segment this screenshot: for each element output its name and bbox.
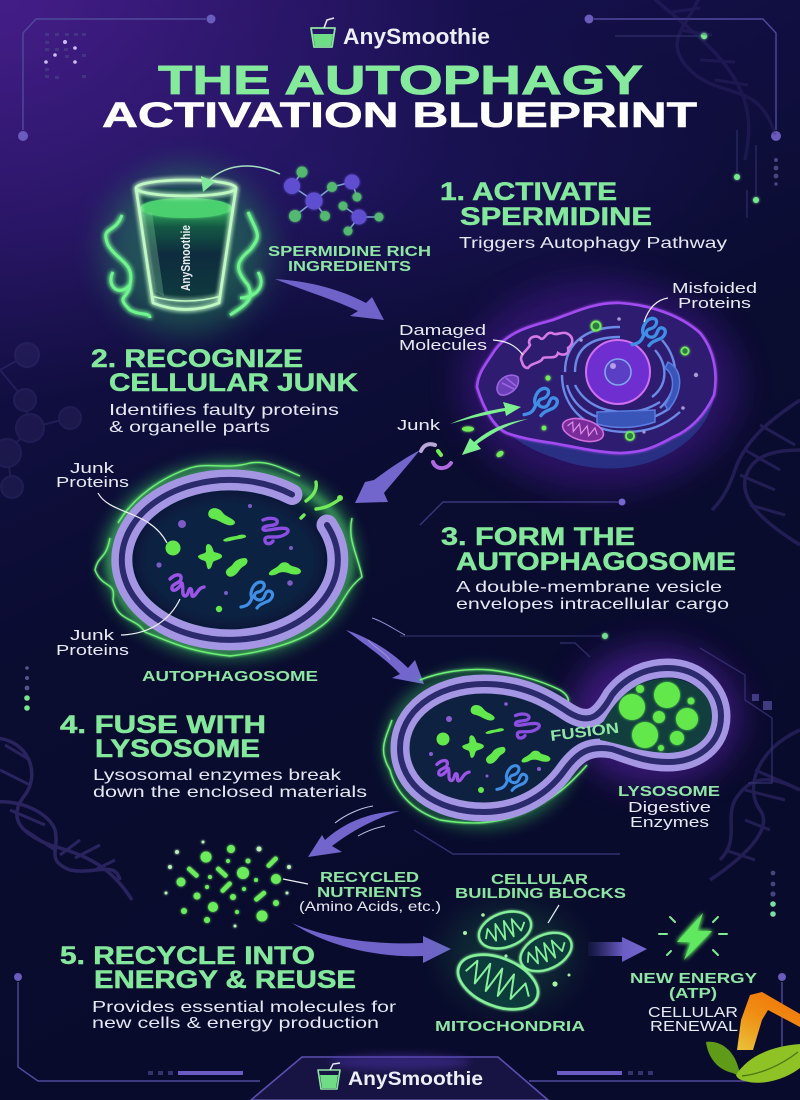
icon: glowing smoothie glass	[104, 166, 280, 332]
label: lysosome: LYSOSOME	[618, 783, 720, 800]
label: cellular building blocks: BUILDING BLOCKS	[455, 885, 626, 902]
label: junk: Junk	[397, 417, 441, 434]
step 1 text: 1. ACTIVATE	[440, 178, 617, 206]
cell diagram	[421, 280, 740, 490]
footer wordmark: AnySmoothie	[348, 1069, 483, 1090]
step 5 text	[60, 942, 397, 1032]
corner brand mark	[706, 992, 800, 1083]
step 3 text: AUTOPHAGOSOME	[456, 548, 736, 576]
glass body	[137, 188, 235, 309]
label: new energy	[630, 970, 757, 1035]
escaping fragments	[301, 482, 340, 518]
step 3 text	[441, 523, 736, 613]
label: cellular building blocks	[455, 871, 626, 923]
label: damaged molecules	[399, 322, 523, 355]
footer logo panel	[251, 1054, 548, 1100]
junk protein	[524, 388, 557, 416]
arrow: fusion to nutrients	[308, 806, 400, 857]
title: ACTIVATION BLUEPRINT	[102, 96, 697, 135]
arrow: autophagosome to fusion	[346, 618, 424, 684]
molecule: spermidine	[284, 166, 384, 236]
recycled nutrient particles	[164, 840, 291, 928]
step 2 text: Identifies faulty proteins	[109, 402, 339, 419]
fusion diagram	[384, 646, 740, 823]
faint molecule decoration	[0, 343, 81, 498]
step 2 text: CELLULAR JUNK	[109, 369, 358, 397]
title: THE AUTOPHAGY	[158, 57, 643, 103]
step 4 text: Lysosomal enzymes break	[93, 767, 342, 784]
label: recycled nutrients: RECYCLED	[320, 869, 419, 886]
label: junk proteins upper: Proteins	[56, 474, 129, 491]
icon: smoothie glass	[311, 18, 335, 47]
step 5 text: 5. RECYCLE INTO	[60, 942, 315, 970]
cargo	[471, 705, 495, 720]
step 3 text: 3. FORM THE	[441, 523, 635, 551]
step 4 text: down the enclosed materials	[93, 784, 367, 801]
step 4 text	[60, 711, 367, 801]
label: lysosome: Enzymes	[630, 814, 709, 831]
label: new energy: CELLULAR	[648, 1004, 738, 1021]
label: junk proteins lower: Proteins	[56, 642, 129, 659]
arrow into the glass	[201, 166, 280, 192]
green swirls	[106, 212, 261, 318]
green vesicles	[462, 322, 689, 458]
step 5 text: Provides essential molecules for	[92, 999, 397, 1016]
label: lysosome: Digestive	[628, 799, 711, 816]
label: new energy: (ATP)	[669, 985, 717, 1002]
double membrane ring	[122, 480, 338, 640]
mitochondrion	[560, 414, 606, 446]
step 1 text: SPERMIDINE	[460, 203, 652, 231]
label: damaged molecules: Molecules	[399, 337, 487, 354]
label: recycled nutrients	[283, 869, 441, 914]
arrow: cell to autophagosome	[355, 450, 420, 503]
step 5 text: ENERGY & REUSE	[94, 966, 356, 994]
damaged molecules squiggle	[521, 333, 572, 368]
label: cellular building blocks: CELLULAR	[491, 871, 588, 888]
misfolded protein	[632, 318, 665, 346]
lightning edge	[95, 462, 362, 656]
title	[102, 57, 697, 135]
green arrow in	[450, 402, 521, 424]
label: junk proteins upper: Junk	[70, 460, 115, 477]
junk fragments	[421, 444, 451, 468]
label: spermidine rich ingredients: SPERMIDINE RICH	[268, 243, 431, 260]
icon: energy bolt	[659, 913, 727, 960]
arrow: mitochondria to ATP	[588, 937, 647, 962]
step 4 text: LYSOSOME	[95, 735, 260, 763]
step 1 text	[440, 178, 727, 252]
arrow: nutrients to mitochondria	[292, 923, 451, 963]
autophagosome	[95, 462, 362, 656]
label: autophagosome: AUTOPHAGOSOME	[142, 668, 318, 685]
step 4 text: 4. FUSE WITH	[60, 711, 266, 739]
step 1 text: Triggers Autophagy Pathway	[459, 235, 727, 252]
fusion label: FUSION	[549, 720, 620, 745]
label: junk proteins lower: Junk	[70, 627, 115, 644]
label: new energy: NEW ENERGY	[630, 970, 757, 987]
logo wordmark: AnySmoothie	[343, 24, 490, 49]
label: spermidine rich ingredients: INGREDIENTS	[288, 258, 411, 275]
label: damaged molecules: Damaged	[399, 322, 486, 339]
step 3 text: envelopes intracellular cargo	[456, 596, 729, 613]
cargo	[208, 508, 235, 525]
lysosome enzymes	[619, 682, 698, 751]
label: recycled nutrients: (Amino Acids, etc.)	[299, 899, 441, 914]
glass label: AnySmoothie	[179, 225, 193, 291]
top logo	[311, 18, 490, 49]
label: misfolded proteins: Misfoided	[672, 280, 757, 297]
icon: footer glass	[318, 1063, 340, 1089]
step 5 text: new cells & energy production	[92, 1015, 379, 1032]
step 2 text	[91, 345, 358, 436]
label: new energy: RENEWAL	[650, 1018, 738, 1035]
step 3 text: A double-membrane vesicle	[456, 579, 722, 596]
mitochondria	[445, 905, 578, 1020]
label: mitochondria: MITOCHONDRIA	[435, 1018, 585, 1035]
purple folded organelle	[497, 375, 518, 395]
membrane	[400, 668, 721, 812]
label: misfolded proteins	[644, 280, 757, 322]
nucleus and endoplasmic reticulum	[562, 327, 680, 432]
green arrow out	[462, 419, 528, 455]
label: junk proteins upper	[56, 460, 167, 543]
label: spermidine rich ingredients	[268, 243, 431, 275]
label: lysosome	[618, 783, 720, 831]
label: recycled nutrients: NUTRIENTS	[317, 884, 422, 901]
lightning edge	[384, 669, 587, 823]
label: misfolded proteins: Proteins	[678, 295, 751, 312]
label: junk proteins lower	[56, 599, 180, 659]
cell body	[477, 303, 715, 468]
step 2 text: & organelle parts	[109, 419, 270, 436]
arrow: glass to cell	[275, 279, 384, 320]
step 2 text: 2. RECOGNIZE	[91, 345, 303, 373]
